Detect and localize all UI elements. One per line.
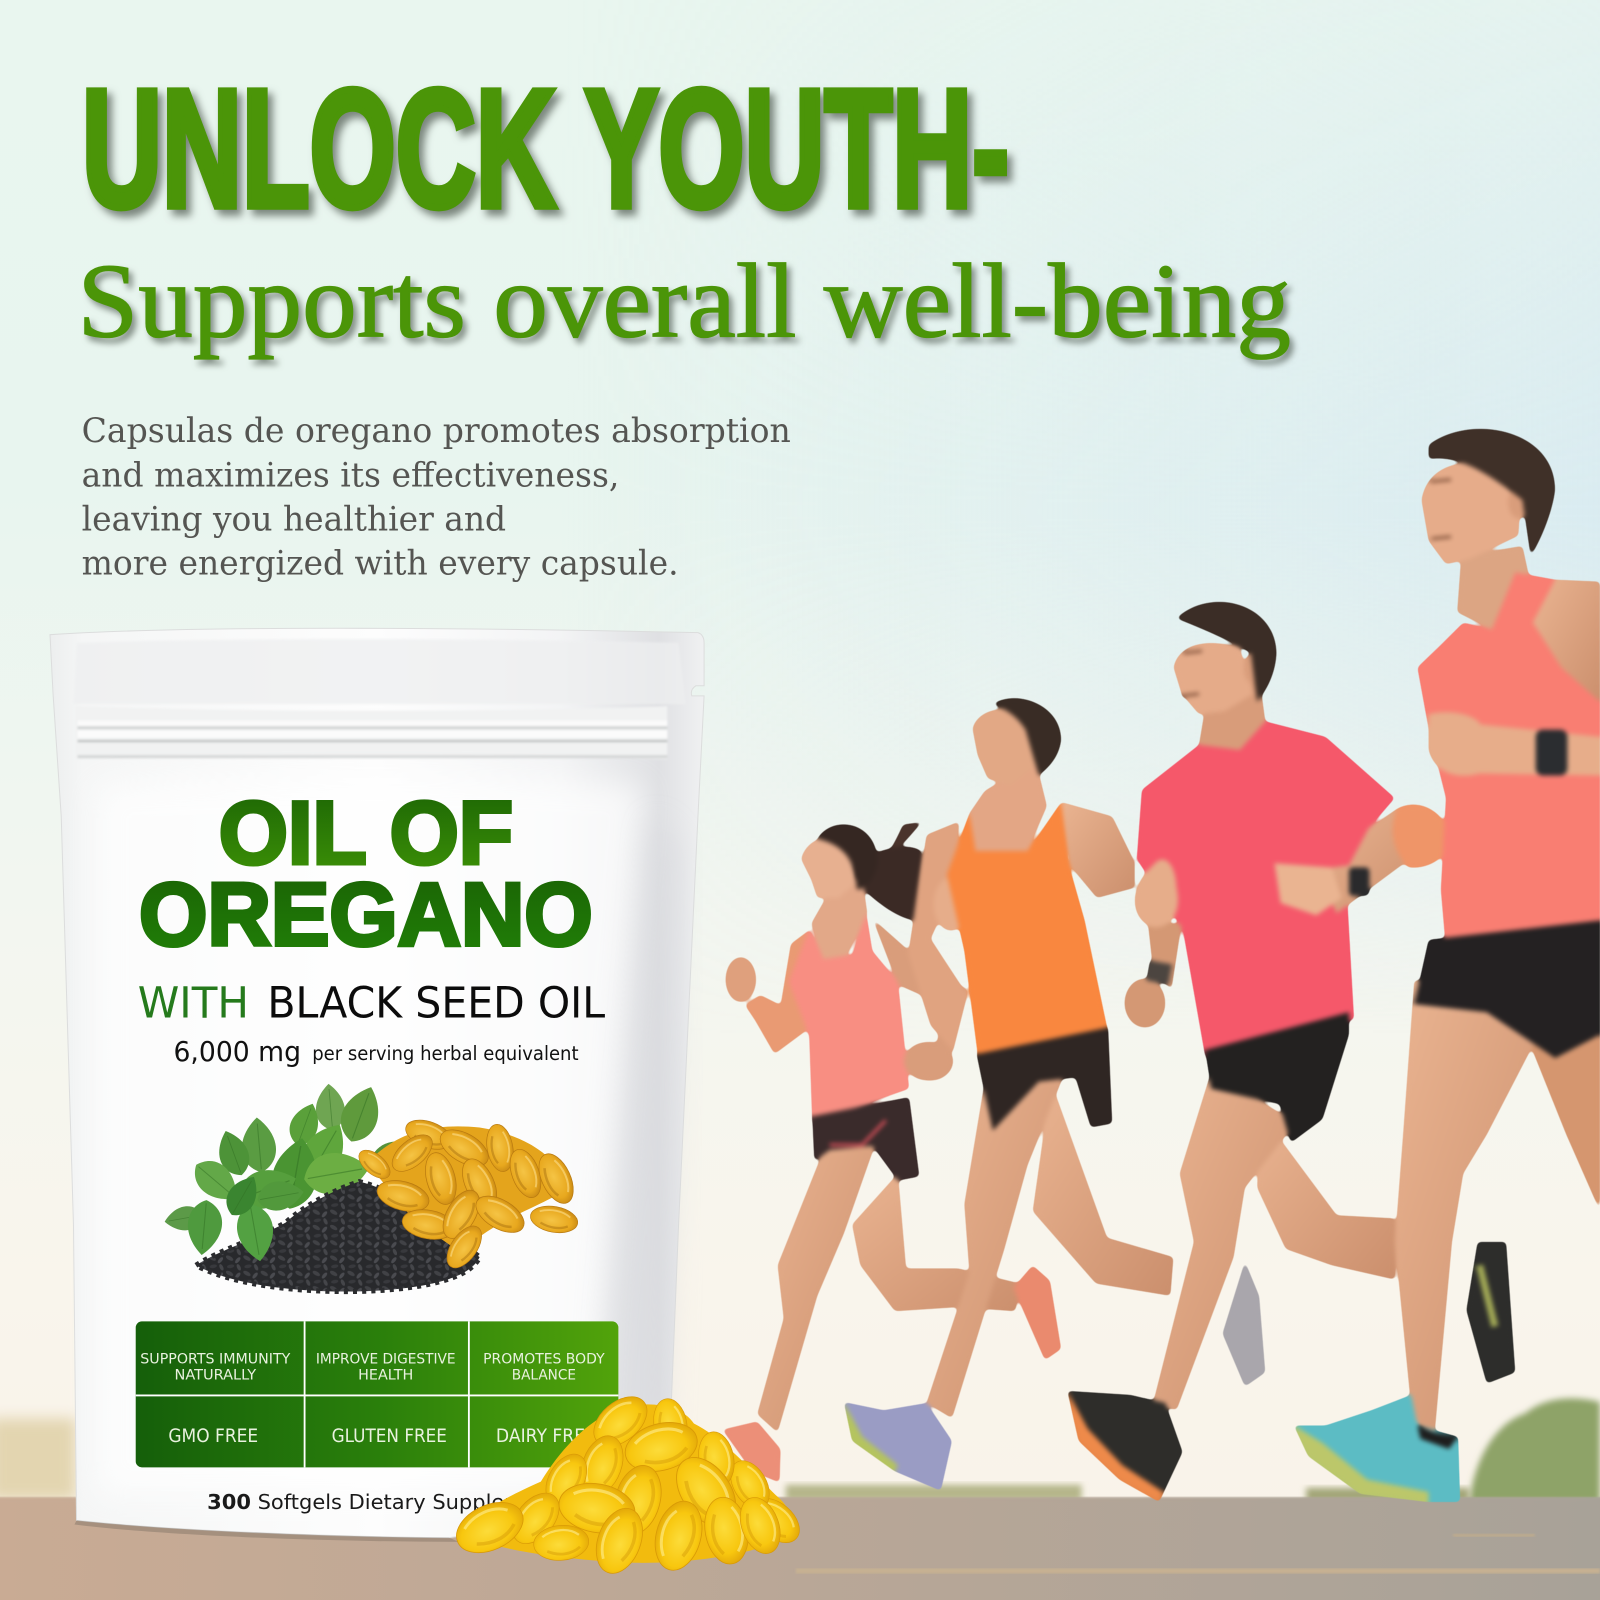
description paragraph: Capsulas de oregano promotes absorption: [82, 411, 791, 450]
subtitle: with black seed oil: BLACK SEED OIL: [267, 978, 605, 1028]
benefit labels row 1: IMPROVE DIGESTIVE: [316, 1351, 456, 1367]
benefit labels row 1: HEALTH: [358, 1368, 413, 1384]
benefit labels row 1: BALANCE: [512, 1368, 576, 1384]
runner 4: man in coral tank: [1294, 429, 1600, 1502]
main white panel: [97, 777, 643, 1495]
icon: front oregano leaves: [163, 1170, 306, 1264]
subheadline: Supports overall well-being: Supports overall well-being: [78, 242, 1291, 360]
zip seal: [76, 706, 667, 759]
ground: horizon scrub, road and tree: [0, 1398, 1600, 1600]
benefit labels row 2: GMO FREE: [168, 1426, 258, 1447]
description paragraph: leaving you healthier and: [82, 500, 506, 539]
benefit labels row 1: NATURALLY: [174, 1368, 256, 1384]
runners photo: [722, 429, 1600, 1502]
subtitle: with black seed oil: WITH: [138, 978, 249, 1028]
pouch top panel: [73, 639, 686, 704]
product title: [139, 784, 593, 964]
description paragraph: more energized with every capsule.: [82, 543, 679, 582]
pouch body: [50, 628, 704, 1538]
pouch bottom shadow: [74, 1520, 459, 1542]
dosage line: [173, 1036, 579, 1068]
description paragraph: and maximizes its effectiveness,: [82, 456, 619, 495]
runner 3: man in pink shirt: [1067, 602, 1515, 1502]
softgel count line: 300 Softgels Dietary Supplement: [207, 1490, 559, 1514]
panel: product pouch: [50, 628, 704, 1542]
dosage line: per serving herbal equivalent: [312, 1042, 579, 1065]
icon: softgel capsules on pouch: [354, 1114, 580, 1274]
benefit labels row 2: DAIRY FREE: [496, 1426, 596, 1447]
benefit labels row 2: [168, 1426, 596, 1447]
icon: black seed pile: [196, 1182, 480, 1292]
benefit labels row 1: SUPPORTS IMMUNITY: [140, 1351, 291, 1367]
runner 2: man in orange tank: [844, 698, 1265, 1491]
benefit labels row 2: GLUTEN FREE: [332, 1426, 447, 1447]
right fold shading: [602, 816, 680, 1490]
product title: OIL OF: [219, 784, 513, 883]
panel: product pouch: OREGANO: [139, 865, 593, 964]
panel: benefits table: [136, 1321, 618, 1467]
icon: softgel capsule pile: [448, 1387, 808, 1580]
benefit labels row 1: [140, 1351, 605, 1384]
runner 1: woman in coral tank: [722, 820, 1061, 1483]
benefit labels row 1: PROMOTES BODY: [483, 1351, 605, 1367]
dosage line: 6,000 mg: [173, 1036, 301, 1068]
icon: oregano leaves: [186, 1081, 423, 1216]
description paragraph: [82, 411, 791, 582]
